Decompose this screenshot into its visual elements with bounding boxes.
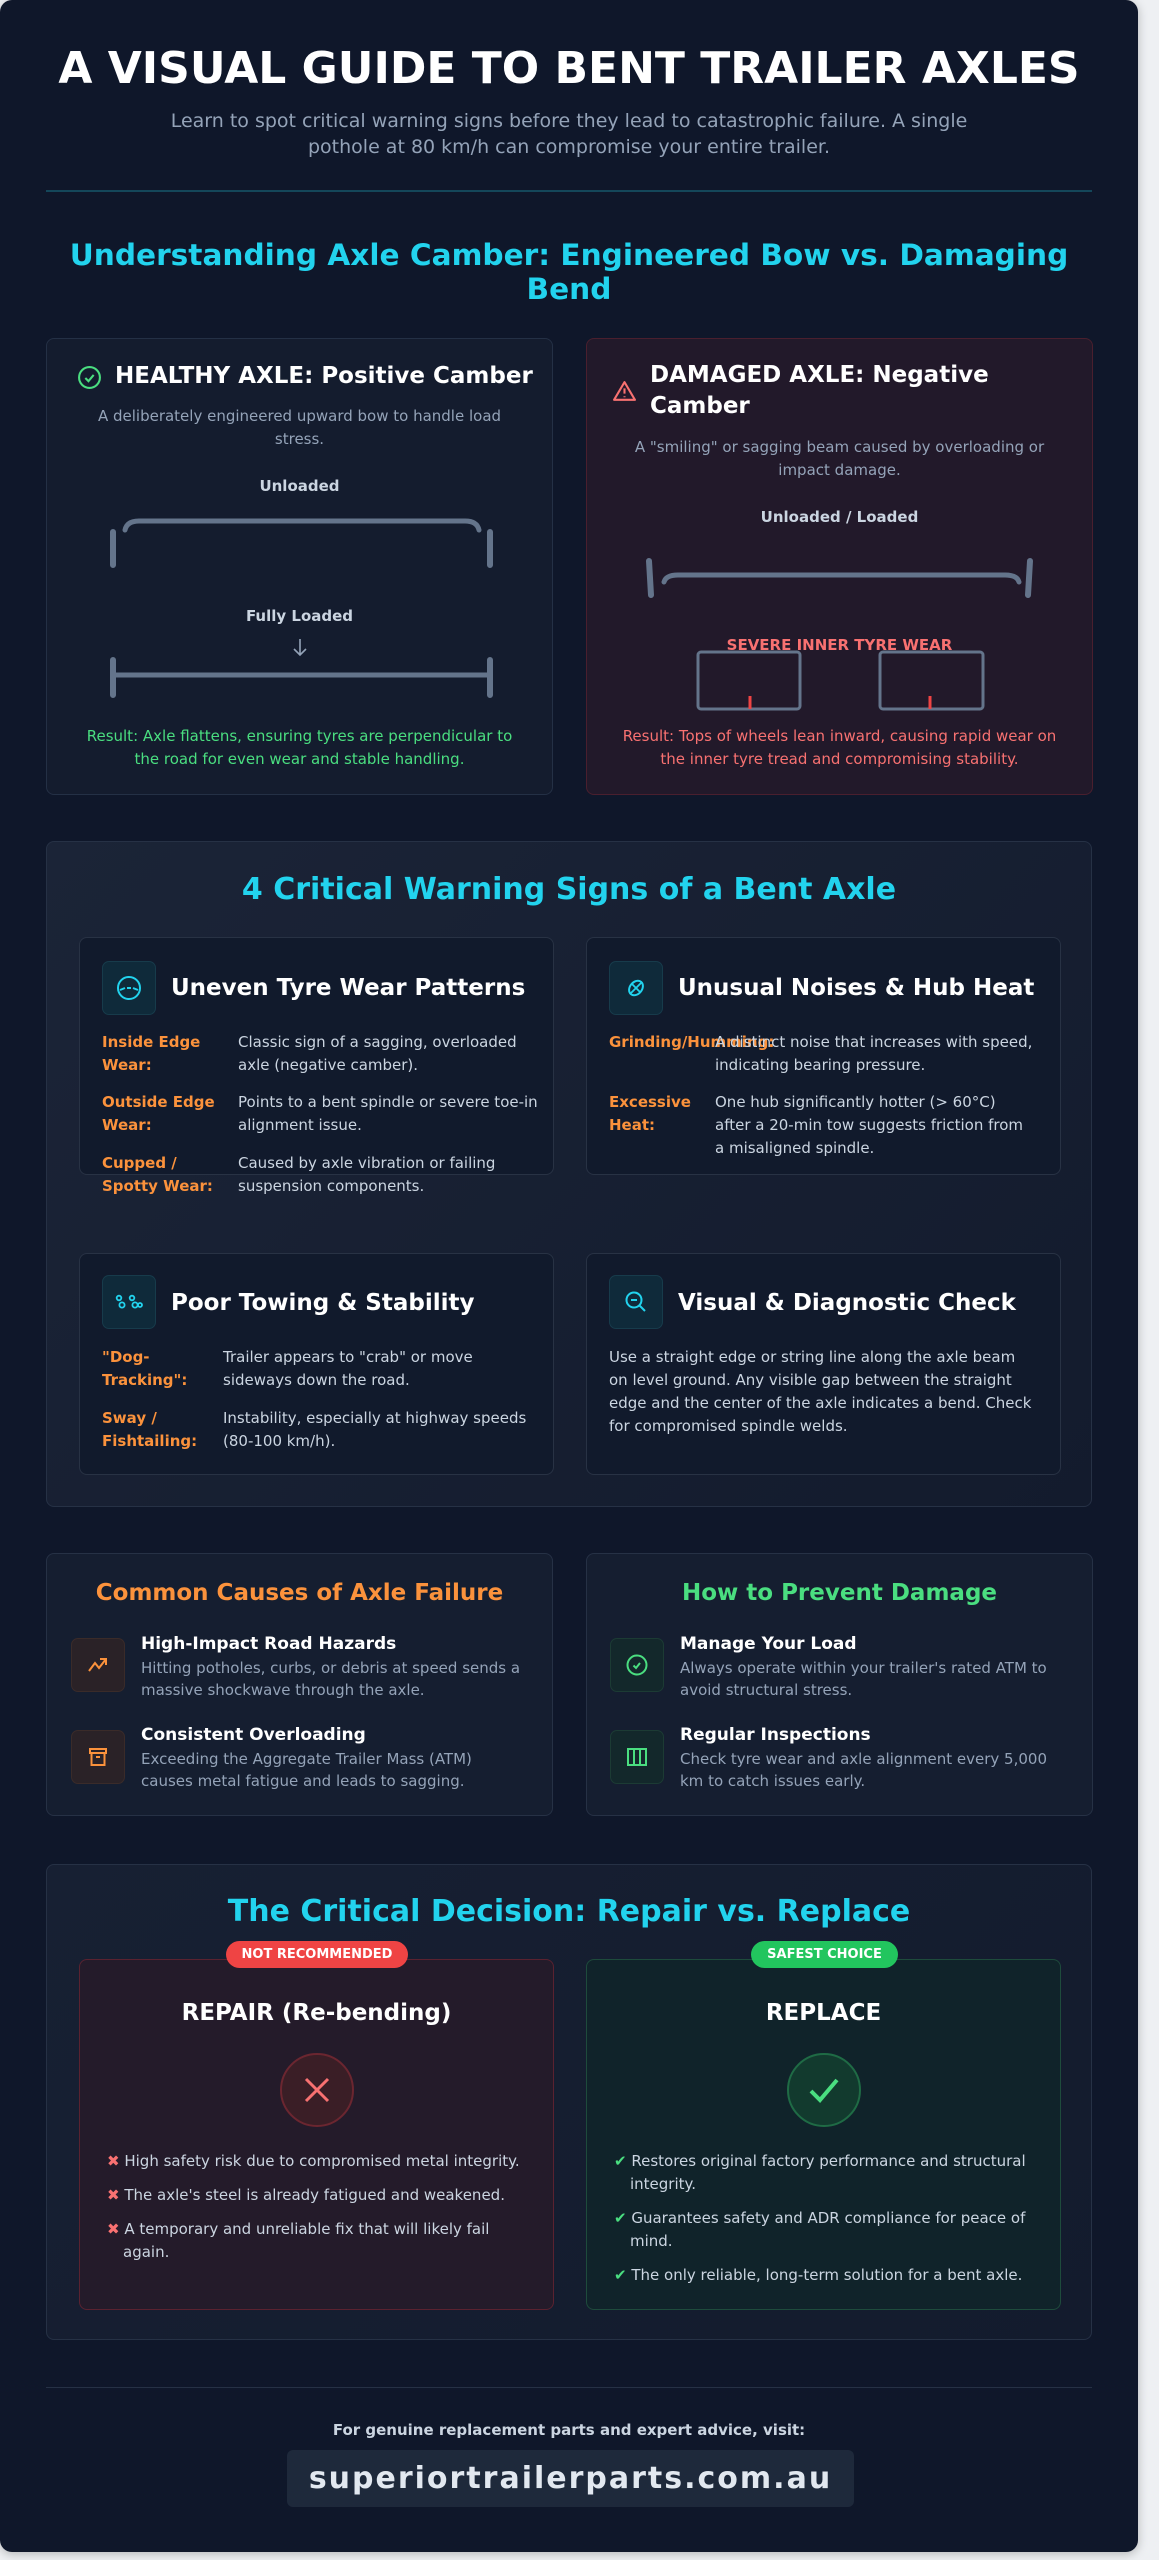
- panel: damaged axle: [586, 338, 1093, 795]
- title: A VISUAL GUIDE TO BENT TRAILER AXLES: [58, 43, 1080, 94]
- card: noises & heat: One hub significantly hotter (> 60°C) after a 20-min tow suggests friction from a misaligned spindle.: [715, 1093, 1023, 1157]
- panel title: [650, 362, 989, 419]
- description: impact damage.: [778, 461, 901, 479]
- icon: warning: [613, 381, 636, 401]
- heading: The Critical Decision: Repair vs. Replace: [228, 1894, 910, 1929]
- subtitle: [171, 110, 967, 158]
- heading: Common Causes of Axle Failure: [96, 1580, 503, 1606]
- panel: repair vs replace: [46, 1864, 1092, 2340]
- panel title: Camber: [650, 393, 750, 419]
- result text: [623, 727, 1056, 768]
- label unloaded/loaded: Unloaded / Loaded: [761, 508, 918, 526]
- item: overloading: Exceeding the Aggregate Trailer Mass (ATM) causes metal fatigue and leads to sagging.: [141, 1750, 472, 1790]
- item: road hazards: High-Impact Road Hazards: [141, 1634, 396, 1654]
- description: A deliberately engineered upward bow to handle load: [98, 407, 501, 425]
- row: cupped: [102, 1154, 213, 1195]
- result text: the inner tyre tread and compromising stability.: [660, 750, 1019, 768]
- row: cupped: Spotty Wear:: [102, 1177, 213, 1195]
- row: heat: Excessive: [609, 1093, 691, 1111]
- card: repair: [79, 1959, 554, 2310]
- icon: check: [787, 2053, 861, 2127]
- card title: Poor Towing & Stability: [171, 1290, 474, 1316]
- card: tyre wear: Caused by axle vibration or failing suspension components.: [238, 1154, 495, 1195]
- heading: 4 Critical Warning Signs of a Bent Axle: [242, 872, 896, 907]
- diagram: unloaded axle: [110, 518, 493, 698]
- list: pros: [614, 2152, 1026, 2284]
- icon: trend: [71, 1638, 125, 1692]
- heading: axle camber: Understanding Axle Camber: Engineered Bow vs. Damaging: [70, 238, 1068, 272]
- icon: bearing: [609, 961, 663, 1015]
- icon: check circle: [78, 366, 101, 389]
- row: sway: Fishtailing:: [102, 1432, 197, 1450]
- card: replace: [586, 1959, 1061, 2310]
- badge: not recommended: [226, 1941, 408, 1968]
- row: inside edge: Inside Edge: [102, 1033, 200, 1051]
- card: tyre wear: Points to a bent spindle or severe toe-in alignment issue.: [238, 1093, 538, 1134]
- row: inside edge: Wear:: [102, 1056, 152, 1074]
- description: [98, 407, 501, 448]
- row: dog tracking: Tracking":: [102, 1371, 187, 1389]
- icon: cross: [280, 2053, 354, 2127]
- card: tyre wear: Classic sign of a sagging, overloaded axle (negative camber).: [238, 1033, 517, 1074]
- diagram: sagging axle and tyres: [646, 558, 1033, 710]
- list: cons: ✖ The axle's steel is already fatigued and weakened.: [107, 2186, 505, 2204]
- subtitle: Learn to spot critical warning signs before they lead to catastrophic failure. A single: [171, 110, 967, 132]
- list: cons: [107, 2152, 520, 2261]
- card title: Uneven Tyre Wear Patterns: [171, 975, 525, 1001]
- row: cupped: Cupped /: [102, 1154, 177, 1172]
- list: cons: ✖ High safety risk due to compromised metal integrity.: [107, 2152, 520, 2170]
- description: A "smiling" or sagging beam caused by overloading or: [635, 438, 1044, 456]
- row: heat: [609, 1093, 691, 1134]
- list: pros: ✔ Restores original factory performance and structural integrity.: [614, 2152, 1026, 2193]
- card: towing stability: Trailer appears to "crab" or move sideways down the road.: [223, 1348, 473, 1389]
- label unloaded: Unloaded: [259, 477, 340, 495]
- result text: [87, 727, 512, 768]
- row: outside edge: Wear:: [102, 1116, 152, 1134]
- icon: tyre: [102, 961, 156, 1015]
- item: inspections: [610, 1725, 1047, 1790]
- row: dog tracking: [102, 1348, 187, 1389]
- list: pros: ✔ The only reliable, long-term solution for a bent axle.: [614, 2266, 1022, 2284]
- description: [635, 438, 1044, 479]
- icon: magnifier: [609, 1275, 663, 1329]
- icon: links: [102, 1275, 156, 1329]
- card: noises & heat: A distinct noise that increases with speed, indicating bearing pressure.: [715, 1033, 1032, 1074]
- badge: safest choice: SAFEST CHOICE: [767, 1947, 882, 1962]
- card: towing stability: [79, 1253, 554, 1475]
- footer url box: [287, 2450, 854, 2507]
- heading: How to Prevent Damage: [682, 1580, 997, 1606]
- label fully loaded: Fully Loaded: [246, 607, 353, 625]
- badge: safest choice: [751, 1941, 898, 1968]
- panel title: HEALTHY AXLE: Positive Camber: [115, 363, 533, 389]
- list: pros: ✔ Guarantees safety and ADR compliance for peace of mind.: [614, 2209, 1025, 2250]
- item: inspections: Check tyre wear and axle alignment every 5,000 km to catch issues early.: [680, 1750, 1047, 1790]
- list: cons: ✖ A temporary and unreliable fix that will likely fail again.: [107, 2220, 489, 2261]
- panel: causes: [46, 1553, 553, 1816]
- heading: axle camber: [70, 238, 1068, 306]
- card title: REPLACE: [766, 2000, 881, 2026]
- item: overloading: [71, 1725, 472, 1790]
- row: grinding: Grinding/Humming:: [609, 1033, 774, 1051]
- subtitle: pothole at 80 km/h can compromise your entire trailer.: [308, 136, 830, 158]
- panel: healthy axle: [46, 338, 553, 795]
- item: overloading: Consistent Overloading: [141, 1725, 366, 1745]
- item: road hazards: Hitting potholes, curbs, or debris at speed sends a massive shockwave through the axle.: [141, 1659, 520, 1699]
- label severe wear: SEVERE INNER TYRE WEAR: [727, 636, 952, 654]
- row: heat: Heat:: [609, 1116, 655, 1134]
- card title: REPAIR (Re-bending): [182, 2000, 451, 2026]
- icon: box: [71, 1730, 125, 1784]
- card title: Visual & Diagnostic Check: [678, 1290, 1016, 1316]
- item: manage load: [610, 1634, 1047, 1699]
- card title: Unusual Noises & Hub Heat: [678, 975, 1034, 1001]
- result text: Result: Tops of wheels lean inward, causing rapid wear on: [623, 727, 1056, 745]
- card: tyre wear: [79, 937, 554, 1175]
- item: road hazards: [71, 1634, 520, 1699]
- icon: columns: [610, 1730, 664, 1784]
- card: towing stability: Instability, especially at highway speeds (80-100 km/h).: [223, 1409, 526, 1450]
- row: sway: [102, 1409, 197, 1450]
- heading: axle camber: Bend: [527, 272, 611, 306]
- footer url box: superiortrailerparts.com.au: [309, 2461, 832, 2496]
- row: inside edge: [102, 1033, 200, 1074]
- card: noises & heat: [586, 937, 1061, 1175]
- item: manage load: Always operate within your trailer's rated ATM to avoid structural stress.: [680, 1659, 1047, 1699]
- row: sway: Sway /: [102, 1409, 157, 1427]
- result text: the road for even wear and stable handling.: [135, 750, 464, 768]
- card: diagnostic check: [586, 1253, 1061, 1475]
- row: outside edge: [102, 1093, 215, 1134]
- panel title: DAMAGED AXLE: Negative: [650, 362, 989, 388]
- body text: Use a straight edge or string line along the axle beam on level ground. Any visible gap between the straight edge and the center of the axle indicates a bend. Check for compromised spindle welds.: [609, 1348, 1031, 1435]
- badge: not recommended: NOT RECOMMENDED: [242, 1947, 392, 1962]
- row: outside edge: Outside Edge: [102, 1093, 215, 1111]
- description: stress.: [275, 430, 324, 448]
- item: manage load: Manage Your Load: [680, 1634, 857, 1654]
- panel: prevention: [586, 1553, 1093, 1816]
- icon: check: [610, 1638, 664, 1692]
- panel: warning signs: [46, 841, 1092, 1507]
- item: inspections: Regular Inspections: [680, 1725, 871, 1745]
- footer text: For genuine replacement parts and expert advice, visit:: [333, 2421, 805, 2439]
- row: dog tracking: "Dog-: [102, 1348, 150, 1366]
- result text: Result: Axle flattens, ensuring tyres are perpendicular to: [87, 727, 512, 745]
